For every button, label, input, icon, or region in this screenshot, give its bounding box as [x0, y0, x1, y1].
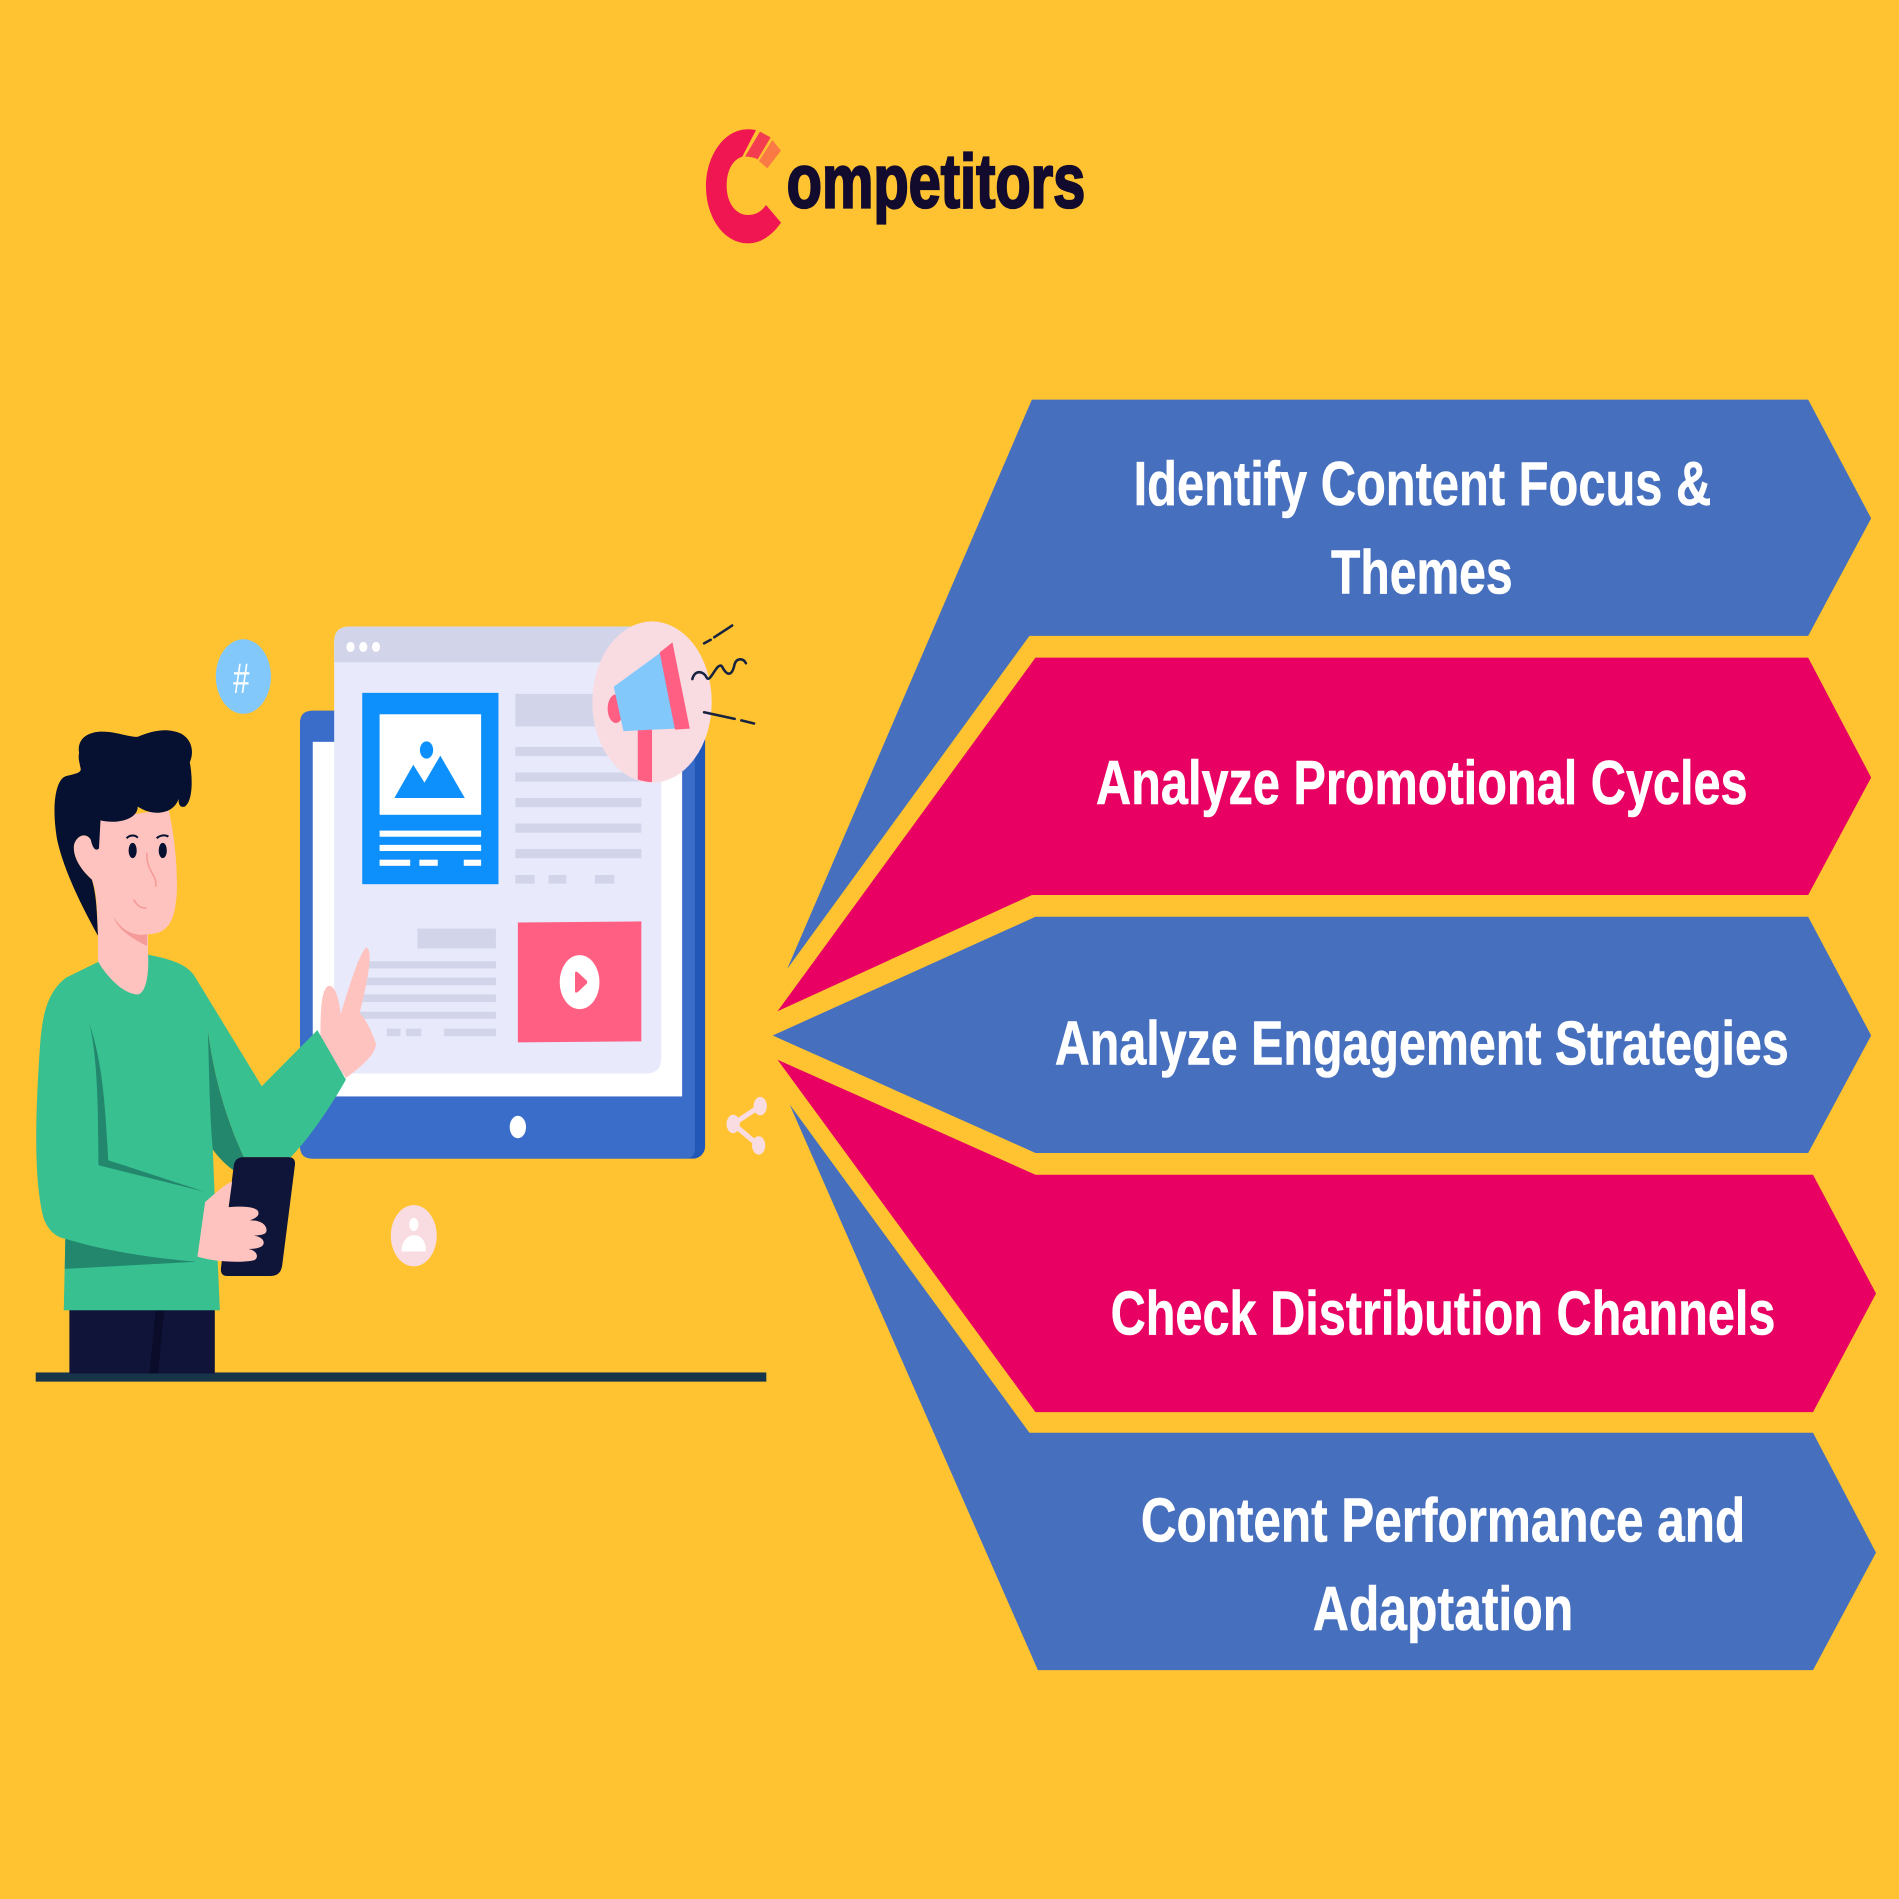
banner 4: Check Distribution Channels — [778, 1060, 1876, 1412]
holding hand — [197, 1182, 267, 1262]
icon: hashtag — [216, 639, 271, 714]
head — [54, 730, 192, 994]
banner 1: Identify Content Focus & Themes — [787, 400, 1871, 969]
banner 1: Identify Content Focus & Themes: Identify Content Focus & — [1134, 450, 1711, 519]
under arm shadow — [207, 1029, 244, 1170]
logo mark: letter C — [706, 129, 781, 243]
logo: Competitors — [706, 129, 1085, 243]
logo wordmark: ompetitors — [787, 139, 1085, 224]
text placeholder: upper right — [515, 694, 641, 884]
tablet — [300, 711, 705, 1159]
pointing hand — [320, 947, 376, 1078]
browser window — [334, 627, 661, 1073]
ground line — [36, 1372, 766, 1382]
person — [36, 730, 376, 1373]
sweater — [36, 955, 346, 1310]
banner 1: Identify Content Focus & Themes: Themes — [1331, 538, 1513, 607]
legs — [69, 1309, 215, 1373]
banner 2: Analyze Promotional Cycles: Analyze Promotional Cycles — [1096, 749, 1748, 818]
banner 5: Content Performance and Adaptation — [790, 1105, 1876, 1670]
phone — [221, 1157, 295, 1276]
text placeholder: lower left — [357, 929, 496, 1036]
icon: user — [391, 1205, 437, 1266]
icon: share — [727, 1097, 767, 1155]
hair — [54, 730, 192, 936]
banner 5: Content Performance and Adaptation: Content Performance and — [1141, 1487, 1745, 1556]
image card — [362, 693, 498, 884]
banner 2: Analyze Promotional Cycles — [778, 658, 1871, 1011]
illustration: person with tablet — [36, 621, 767, 1382]
banner 5: Content Performance and Adaptation: Adaptation — [1313, 1575, 1573, 1644]
video card — [518, 921, 641, 1042]
banner 3: Analyze Engagement Strategies — [773, 917, 1871, 1153]
sweater folds — [65, 1023, 205, 1269]
chevron banners — [773, 400, 1876, 1670]
icon: hashtag: # — [233, 655, 250, 703]
icon: megaphone — [592, 621, 754, 783]
